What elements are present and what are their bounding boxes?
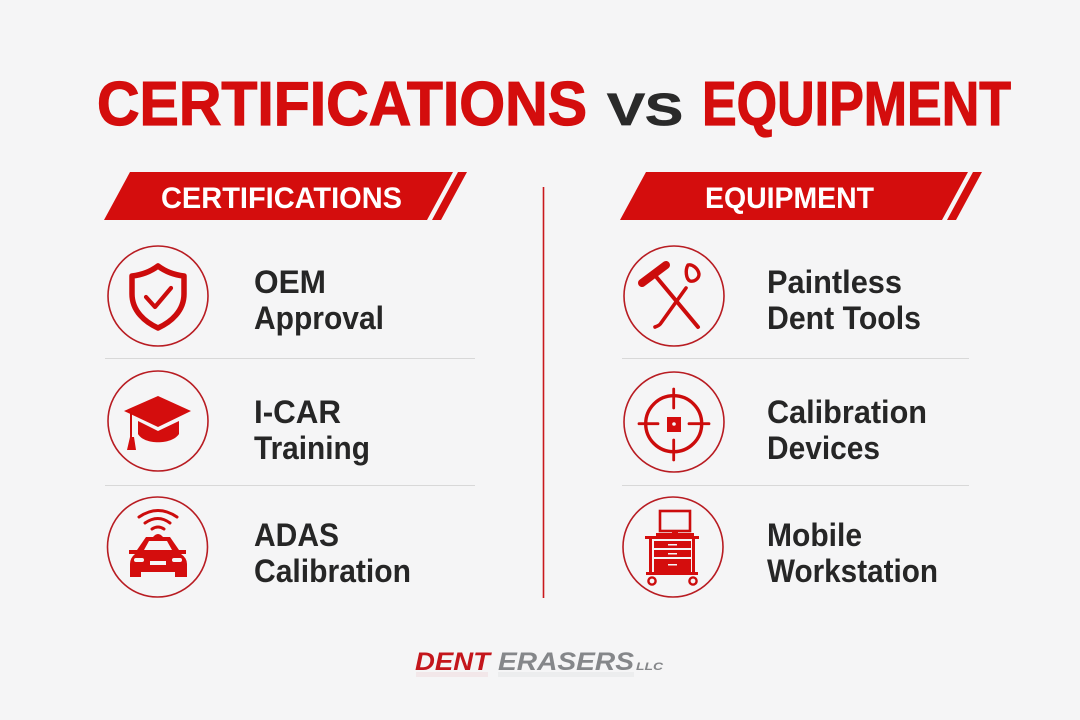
banner: equipment [620,172,982,220]
title: CERTIFICATIONS [97,70,587,139]
banner: equipment: EQUIPMENT [705,182,874,215]
icon: workstation [645,511,699,585]
title: EQUIPMENT [702,70,1011,139]
item: Calibration Devices: Calibration [767,394,927,430]
title [97,70,1011,139]
icon: crossed tools [642,265,699,327]
icon: shield [132,266,184,328]
item: I-CAR Training: Training [254,430,370,466]
item: Calibration Devices: Devices [767,430,880,466]
icon: graduation cap [124,396,191,450]
icon: target [639,389,709,460]
banner: certifications: CERTIFICATIONS [161,182,402,215]
logo: ERASERS [498,648,634,676]
panel: equipment [620,172,982,597]
item: Paintless Dent Tools [624,246,921,346]
icon: connected car [129,510,187,577]
item: I-CAR Training: I-CAR [254,394,341,430]
title: VS [607,84,683,135]
item: ADAS Calibration [108,497,411,597]
item: Mobile Workstation [623,497,938,597]
item: Paintless Dent Tools: Paintless [767,264,902,300]
item: Paintless Dent Tools: Dent Tools [767,300,921,336]
banner: certifications [104,172,467,220]
item: ADAS Calibration: ADAS [254,517,339,553]
item: I-CAR Training [108,371,370,471]
item: Mobile Workstation: Workstation [767,553,938,589]
item: Mobile Workstation: Mobile [767,517,862,553]
panel: certifications [104,172,475,597]
logo: LLC [636,661,664,673]
item: OEM Approval: Approval [254,300,384,336]
logo [415,648,664,677]
item: OEM Approval [108,246,384,346]
logo: DENT [415,648,493,676]
item: OEM Approval: OEM [254,264,326,300]
item: ADAS Calibration: Calibration [254,553,411,589]
item: Calibration Devices [624,372,927,472]
